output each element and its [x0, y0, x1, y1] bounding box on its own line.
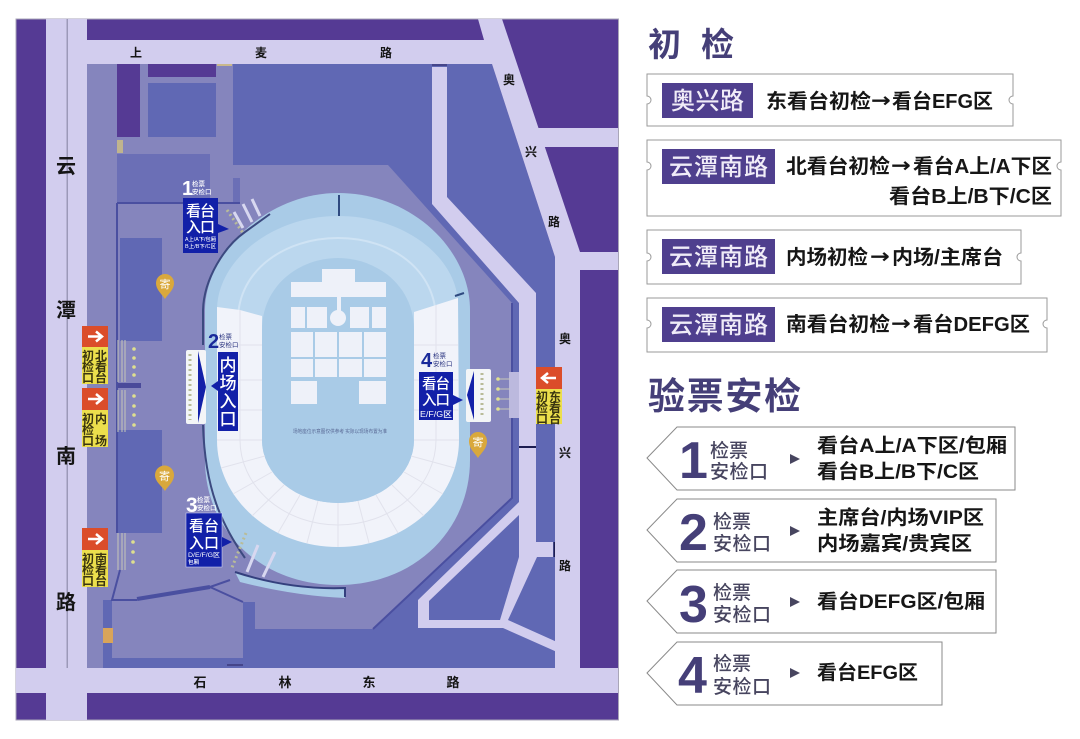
queue lanes: [118, 340, 510, 570]
blocks on plaza: [103, 62, 243, 668]
sign: south stand first check: 检: [82, 562, 94, 577]
checkpoint 4: 安检口: [713, 676, 771, 698]
sign: field first check: 口: [82, 434, 94, 448]
stadium outer bowl: [205, 193, 470, 585]
sign: field first check: [82, 388, 108, 448]
white seating bowl: [217, 298, 459, 547]
sign: east stand first check: 口: [536, 412, 548, 426]
sign: south stand first check: 看: [95, 562, 107, 577]
road name: Shangmai Road: 上: [130, 46, 142, 60]
gate 1: stand entrance: A上/A下/包厢: [185, 236, 216, 243]
road name: Aoxing Road: 兴: [559, 445, 571, 460]
sign: field first check: 场: [95, 434, 107, 448]
card: Yuntan South Road south stand: 南看台初检: [786, 312, 890, 336]
gate 1: stand entrance: 安检口: [192, 187, 212, 196]
road name: Yuntan South Road: 路: [56, 591, 76, 614]
gate 1: stand entrance: 入口: [186, 219, 215, 236]
gate 2: field entrance: 内: [220, 356, 236, 375]
checkpoint 4: 4: [678, 647, 707, 705]
gate 2: field entrance: 场: [220, 374, 236, 393]
checkpoint 2: [647, 499, 996, 562]
sign: south stand first check: 南: [95, 552, 107, 566]
checkpoint 2: 内场嘉宾/贵宾区: [817, 533, 972, 555]
checkpoint 2: 安检口: [713, 533, 771, 555]
gate 1: stand entrance: 1: [182, 178, 193, 200]
sign: north stand first check: 台: [95, 370, 107, 385]
gate 1: stand entrance: [182, 178, 229, 253]
checkpoint 2: 检票: [713, 511, 751, 533]
pitch: [262, 258, 414, 503]
checkpoint 3: 3: [679, 576, 708, 634]
card: Yuntan South Road north stand: 云潭南路: [669, 154, 768, 181]
panel: venue map: [16, 19, 618, 720]
gate 1: stand entrance: B上/B下/C区: [185, 243, 216, 250]
gate 4: stand entrance: 检票: [433, 351, 446, 360]
road name: Yuntan South Road: [56, 156, 76, 614]
sign: east stand first check: [536, 367, 562, 426]
gate 2: field entrance: 2: [208, 331, 219, 353]
road name: Shilin East Road: 路: [446, 675, 460, 690]
card: Yuntan South Road south stand: 云潭南路: [669, 312, 768, 339]
icon: location pin 3: 寄: [472, 435, 484, 449]
road name: Aoxing Road: 奥: [559, 331, 571, 346]
card: Yuntan South Road field: →: [870, 244, 890, 268]
road name: Yuntan South Road: 潭: [56, 299, 76, 322]
card: Yuntan South Road north stand: 看台A上/A下区: [913, 154, 1052, 178]
icon: location pin 2: 寄: [159, 469, 170, 483]
card: Aoxing Road: →: [871, 88, 891, 112]
stadium: [203, 193, 470, 598]
road name: Shilin East Road: [193, 675, 460, 690]
stadium edge lines and gates: [203, 195, 464, 598]
checkpoint 3: [647, 570, 996, 634]
gate 2: field entrance: 检票: [219, 332, 232, 341]
checkpoint 2: 2: [679, 504, 708, 562]
heading: ticket and security check: 验票安检: [648, 376, 801, 417]
gate 1: stand entrance: 看台: [186, 202, 215, 220]
sign: north stand first check: 看: [95, 359, 107, 374]
sign: north stand first check: 北: [95, 349, 107, 363]
sign: north stand first check: [82, 326, 108, 385]
checkpoint 3: 安检口: [713, 604, 771, 626]
gate 1: stand entrance: 检票: [192, 179, 206, 188]
gate 3: stand entrance: 安检口: [197, 503, 216, 512]
gate 3: stand entrance: [186, 494, 232, 567]
checkpoint 1: 检票: [710, 440, 748, 462]
road name: Shangmai Road: 路: [380, 45, 392, 60]
checkpoint 4: 看台EFG区: [817, 661, 918, 684]
card: Yuntan South Road field: 内场初检: [786, 245, 868, 269]
checkpoint 1: [647, 427, 1015, 490]
sign: field first check: 检: [82, 422, 94, 437]
gate 3: stand entrance: 包厢: [188, 558, 200, 566]
road name: Shilin East Road: 林: [278, 675, 292, 690]
icon: location pin 3: [469, 432, 487, 458]
sign: north stand first check: 口: [82, 371, 94, 385]
card: Aoxing Road: 奥兴路: [671, 88, 744, 115]
icon: location pin 1: 寄: [160, 277, 170, 291]
icon: location pin 1: [156, 274, 174, 299]
gate 3: stand entrance: 检票: [197, 495, 210, 504]
card: Aoxing Road: 看台EFG区: [892, 89, 993, 113]
sign: north stand first check: 检: [82, 359, 94, 374]
sign: field first check: 初: [82, 411, 94, 426]
card: Yuntan South Road north stand: [647, 140, 1061, 216]
sign: east stand first check: 检: [536, 400, 548, 415]
gate 4: stand entrance: E/F/G区: [420, 410, 452, 419]
gate 3: stand entrance: 3: [186, 494, 198, 517]
gate 4: stand entrance: 看台: [422, 375, 450, 393]
sign: east stand first check: 看: [549, 400, 561, 415]
card: Yuntan South Road south stand: →: [891, 311, 911, 335]
card: Yuntan South Road south stand: 看台DEFG区: [913, 312, 1030, 336]
gate 2: field entrance: 入: [220, 392, 236, 411]
checkpoint 1: 看台A上/A下区/包厢: [817, 434, 1007, 457]
road name: Yuntan South Road: 南: [56, 445, 76, 468]
checkpoint 3: 看台DEFG区/包厢: [817, 590, 985, 613]
gate 4: stand entrance: [419, 350, 491, 422]
sign: north stand first check: 初: [82, 348, 94, 363]
card: Yuntan South Road south stand: [647, 298, 1047, 352]
road name: Aoxing Road: 路: [559, 558, 571, 573]
checkpoint 4: [647, 642, 942, 705]
sign: south stand first check: 初: [82, 551, 94, 566]
sign: field first check: 内: [95, 411, 107, 426]
road name: Aoxing Road: 路: [548, 214, 560, 229]
gate 4: stand entrance: 入口: [422, 393, 450, 409]
gate 3: stand entrance: 入口: [189, 535, 219, 552]
sign: south stand first check: 台: [95, 573, 107, 588]
checkpoint 3: 检票: [713, 582, 751, 604]
gate 4: stand entrance: 安检口: [433, 359, 452, 368]
icon: location pin 2: [155, 466, 174, 491]
gate 3: stand entrance: 看台: [189, 517, 219, 535]
gate 2: field entrance: [186, 331, 238, 431]
checkpoint 1: 安检口: [710, 461, 768, 483]
card: Aoxing Road: 东看台初检: [766, 89, 871, 113]
card: Yuntan South Road field: 云潭南路: [669, 244, 768, 271]
road name: Shangmai Road: [130, 45, 392, 60]
ground: grey plaza around stadium: [87, 64, 512, 668]
gate 2: field entrance: 安检口: [219, 340, 238, 349]
roads: [16, 19, 618, 720]
sign: east stand first check: 台: [549, 411, 561, 426]
inner service roads: [418, 67, 557, 652]
sign: south stand first check: [82, 528, 108, 588]
checkpoint 4: 检票: [713, 653, 751, 675]
ground: blue land blocks: [87, 64, 555, 668]
barrier lines: [227, 64, 555, 666]
gate 3: stand entrance: D/E/F/G区: [188, 552, 220, 559]
plaza paths: [112, 203, 512, 629]
card: Aoxing Road: [647, 74, 1013, 126]
heading: first check: [648, 26, 734, 63]
card: Yuntan South Road field: 内场/主席台: [892, 245, 1003, 269]
card: Yuntan South Road north stand: →: [891, 153, 911, 177]
sign: south stand first check: 口: [82, 574, 94, 588]
card: Yuntan South Road north stand: 北看台初检: [786, 154, 890, 178]
sign: east stand first check: 东: [549, 389, 561, 404]
gate 2: field entrance: 口: [220, 410, 236, 429]
checkpoint 2: 主席台/内场VIP区: [817, 506, 984, 529]
seating grid: [217, 305, 459, 547]
concourse ring: [217, 216, 458, 440]
checkpoint 1: 看台B上/B下/C区: [817, 460, 979, 483]
sign: east stand first check: 初: [536, 389, 548, 404]
card: Yuntan South Road north stand: 看台B上/B下/C区: [889, 184, 1052, 208]
road name: Aoxing Road: [503, 72, 571, 573]
card: Yuntan South Road field: [647, 230, 1021, 284]
heading: first check: 检: [701, 26, 734, 63]
heading: first check: 初: [648, 26, 681, 63]
checkpoint 1: 1: [679, 432, 708, 490]
gate 4: stand entrance: 4: [421, 350, 433, 372]
road name: Aoxing Road: 奥: [503, 72, 515, 87]
stadium note: 场地座位示意图仅供参考 实际以现场布置为准: [293, 428, 387, 435]
road name: Aoxing Road: 兴: [525, 144, 537, 159]
road name: Shilin East Road: 石: [193, 675, 207, 690]
road name: Shilin East Road: 东: [362, 675, 376, 690]
road name: Yuntan South Road: 云: [56, 156, 76, 178]
road name: Shangmai Road: 麦: [255, 45, 267, 60]
stage and pitch sections: [291, 269, 386, 404]
